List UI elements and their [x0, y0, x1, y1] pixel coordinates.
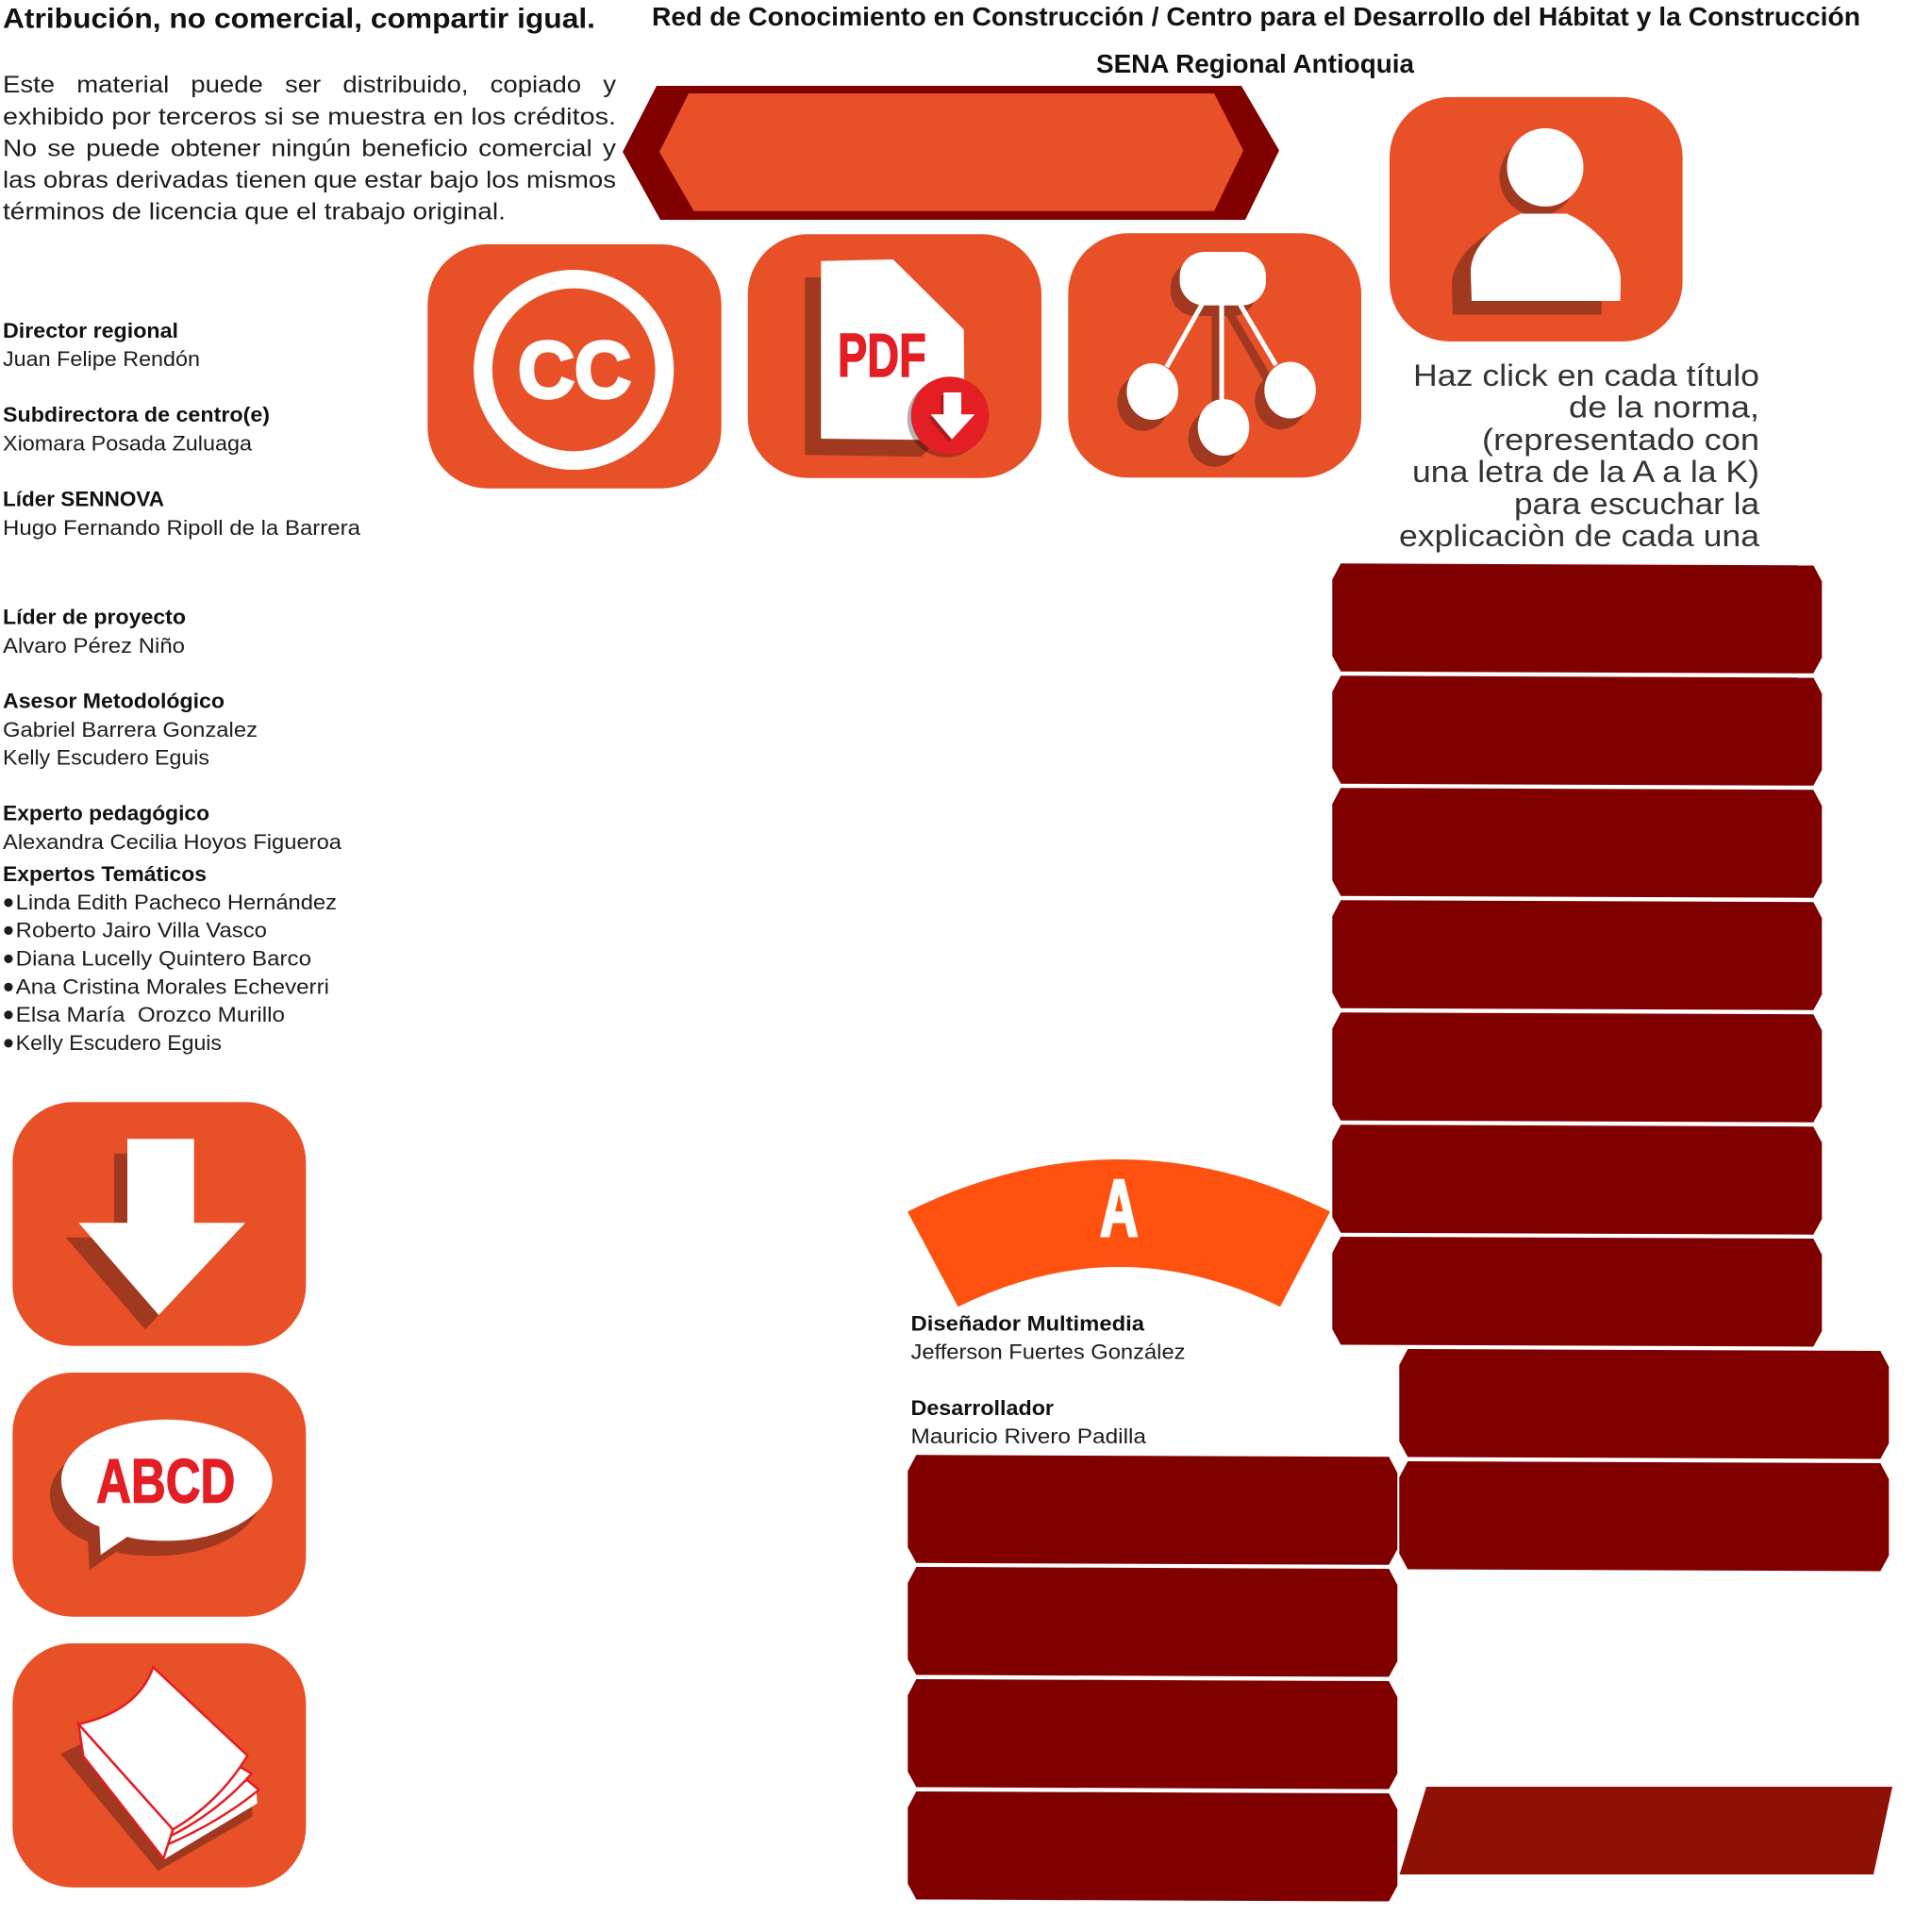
text block: instructions — [1399, 358, 1759, 553]
text block: staff credits: Linda Edith Pacheco Hernández — [16, 891, 337, 914]
icon: speech bubble: ABCD — [96, 1446, 235, 1516]
arc banner: letter A — [908, 1159, 1330, 1307]
text block: staff credits: • — [3, 941, 14, 977]
text block: staff credits: Líder de proyecto — [3, 605, 186, 628]
icon: pdf download — [748, 234, 1041, 478]
buttons: far right column H and I — [1399, 1349, 1889, 1572]
text block: instructions: de la norma, — [1569, 391, 1759, 425]
text block: staff credits: • — [3, 913, 14, 949]
text block: multimedia credits: Diseñador Multimedia — [911, 1312, 1145, 1336]
banner: hexagon — [623, 86, 1279, 220]
text block: staff credits: Hugo Fernando Ripoll de la Barrera — [3, 516, 361, 540]
icon: network — [1068, 233, 1361, 477]
buttons: right column A to G — [1332, 563, 1822, 1347]
text block: multimedia credits: Mauricio Rivero Padilla — [911, 1424, 1147, 1448]
text block: staff credits: Director regional — [3, 319, 178, 342]
text block: staff credits: Experto pedagógico — [3, 802, 209, 824]
text block: staff credits: • — [3, 1025, 14, 1061]
icon: book — [12, 1643, 306, 1888]
text block: instructions: para escuchar la — [1514, 487, 1759, 521]
text block: multimedia credits: Desarrollador — [911, 1396, 1054, 1420]
text block: multimedia credits — [911, 1312, 1185, 1448]
text block: staff credits: Xiomara Posada Zuluaga — [3, 432, 253, 455]
icon: pdf download: PDF — [838, 321, 926, 390]
icon: download arrow — [12, 1102, 306, 1346]
text block: staff credits: • — [3, 997, 14, 1033]
text block: staff credits: Ana Cristina Morales Echeverri — [16, 975, 329, 998]
text block: license description: exhibido por terceros si se muestra en los créditos. — [3, 104, 616, 130]
text block: staff credits: Asesor Metodológico — [3, 689, 225, 713]
icon: person — [1390, 97, 1683, 341]
text block: license description: No se puede obtener ningún beneficio comercial y — [3, 135, 617, 161]
text block: instructions: una letra de la A a la K) — [1412, 455, 1759, 489]
text block: staff credits — [3, 319, 361, 1061]
text block: staff credits: • — [3, 885, 14, 921]
text block: license description: términos de licencia que el trabajo original. — [3, 199, 506, 225]
text block: license description: las obras derivadas tienen que estar bajo los mismos — [3, 167, 616, 193]
text block: staff credits: Alvaro Pérez Niño — [3, 634, 185, 658]
icon: speech bubble — [12, 1373, 306, 1617]
text block: multimedia credits: Jefferson Fuertes González — [911, 1340, 1185, 1363]
text block: staff credits: Gabriel Barrera Gonzalez — [3, 718, 258, 741]
text block: instructions: Haz click en cada título — [1413, 358, 1759, 392]
text block: staff credits: Subdirectora de centro(e) — [3, 403, 270, 426]
heading: license title: Atribución, no comercial, compartir igual. — [3, 4, 595, 35]
text block: staff credits: Juan Felipe Rendón — [3, 347, 200, 371]
heading: institution: Red de Conocimiento en Construcción / Centro para el Desarrollo del Hábitat y la Construcción — [652, 2, 1860, 31]
text block: staff credits: Diana Lucelly Quintero Barco — [16, 947, 311, 970]
icon: creative commons: CC — [518, 325, 631, 414]
arc banner: letter A: A — [1100, 1164, 1138, 1254]
icon: creative commons — [427, 244, 722, 489]
text block: instructions: (representado con — [1482, 423, 1759, 457]
text block: license description — [3, 72, 617, 225]
text block: staff credits: Elsa María Orozco Murillo — [16, 1003, 285, 1026]
text block: license description: Este material puede ser distribuido, copiado y — [3, 72, 617, 98]
text block: staff credits: Expertos Temáticos — [3, 862, 207, 886]
text block: staff credits: • — [3, 970, 14, 1006]
text block: staff credits: Alexandra Cecilia Hoyos Figueroa — [3, 830, 342, 854]
heading: institution — [652, 2, 1860, 78]
text block: staff credits: Roberto Jairo Villa Vasco — [16, 919, 267, 941]
text block: instructions: explicaciòn de cada una — [1399, 519, 1759, 553]
text block: staff credits: Kelly Escudero Eguis — [3, 746, 209, 770]
heading: institution: SENA Regional Antioquia — [1096, 49, 1414, 78]
parallelogram button — [1400, 1787, 1892, 1874]
text block: staff credits: Kelly Escudero Eguis — [16, 1031, 222, 1055]
text block: staff credits: Líder SENNOVA — [3, 487, 164, 511]
buttons: lower column J to M — [908, 1455, 1397, 1902]
